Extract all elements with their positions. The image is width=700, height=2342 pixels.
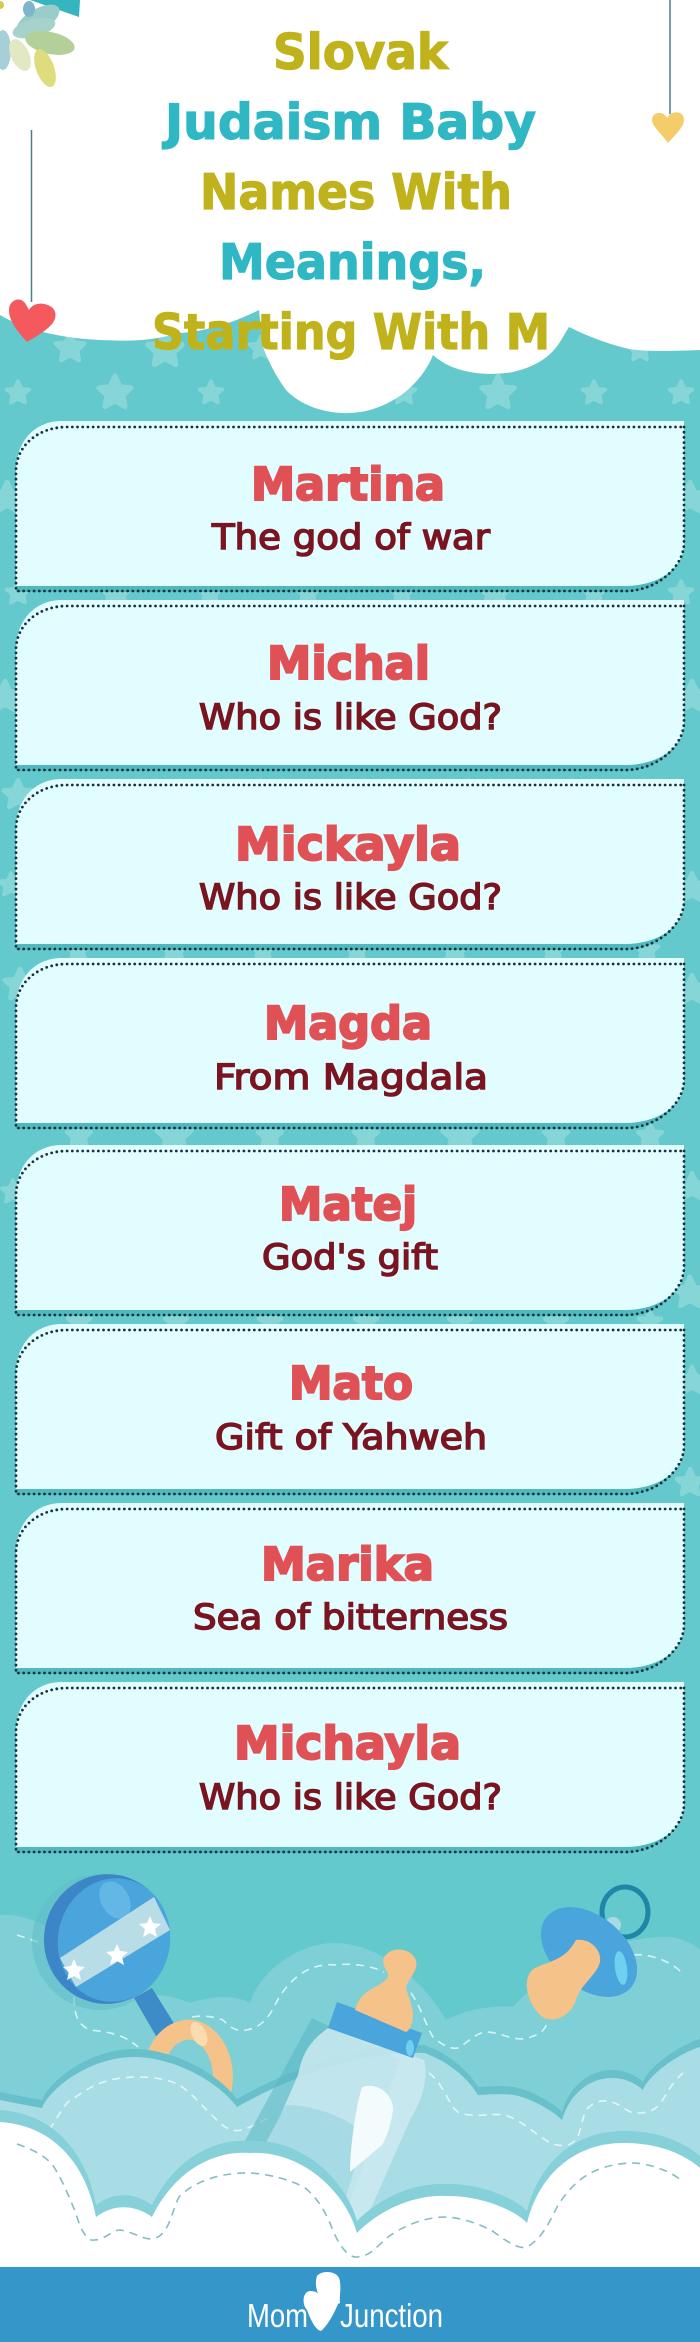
- card: Michayla: Michayla: [234, 1717, 461, 1770]
- card: Matej: God's gift: [262, 1238, 438, 1278]
- left hanging red heart: [9, 130, 56, 342]
- title: Meanings,: [219, 234, 486, 291]
- card: Marika: Marika: [261, 1538, 434, 1591]
- card: Martina: The god of war: [211, 518, 491, 558]
- card: Michal: Michal: [267, 637, 430, 690]
- collar: [328, 2002, 422, 2058]
- title: Judaism Baby: [162, 94, 536, 151]
- card: Martina: [16, 421, 684, 592]
- bottom white cloud shadow: [0, 2110, 700, 2267]
- nipple: [355, 1950, 417, 2032]
- card: Michal: Who is like God?: [199, 698, 502, 738]
- rattle: [17, 1859, 223, 2092]
- card: Michal: [16, 600, 684, 771]
- dashed stitching middle: [49, 2073, 683, 2146]
- title: Names With: [200, 164, 512, 221]
- bottle body: [259, 2028, 426, 2240]
- card: Mato: Mato: [289, 1357, 413, 1410]
- leaf decoration: [0, 0, 80, 90]
- card: Michayla: [16, 1682, 684, 1853]
- dashed stitching lower: [17, 2144, 681, 2257]
- footer bar: [0, 2267, 700, 2342]
- card: Magda: Magda: [264, 997, 432, 1050]
- card: Matej: Matej: [279, 1178, 417, 1231]
- pacifier: [524, 1887, 654, 2020]
- white header cloud: [0, 0, 700, 413]
- card: Mickayla: Mickayla: [235, 818, 461, 871]
- card: Mickayla: Who is like God?: [199, 878, 502, 918]
- card: Matej: [16, 1145, 684, 1316]
- right hanging yellow heart: [652, 0, 684, 143]
- back cloud layer: [0, 1915, 700, 2267]
- mid cloud shadow band: [0, 2039, 700, 2267]
- bottom white cloud: [0, 2122, 700, 2267]
- card: Mato: Gift of Yahweh: [215, 1418, 487, 1458]
- card: Mickayla: [16, 779, 684, 950]
- title: Slovak: [273, 24, 449, 81]
- card: Magda: [16, 958, 684, 1129]
- card: Martina: Martina: [251, 458, 445, 511]
- card: Marika: Sea of bitterness: [193, 1598, 508, 1638]
- MomJunction logo: [247, 2272, 443, 2334]
- mid cloud layer: [0, 2047, 700, 2267]
- card: Marika: [16, 1503, 684, 1674]
- MomJunction logo: Mom: [247, 2297, 308, 2334]
- baby bottle: [240, 1950, 426, 2240]
- handle: [134, 1988, 175, 2036]
- card: Magda: From Magdala: [214, 1058, 488, 1098]
- card: Mato: [16, 1324, 684, 1495]
- card: Michayla: Who is like God?: [199, 1778, 502, 1818]
- teal pennant: [30, 0, 80, 17]
- MomJunction logo: Junction: [340, 2297, 443, 2334]
- logo silhouette: [304, 2272, 340, 2331]
- title: [152, 24, 550, 361]
- title: Starting With M: [152, 304, 550, 361]
- star pattern: [0, 332, 700, 1494]
- dashed stitching upper: [17, 1935, 681, 2048]
- orange ring: [154, 2030, 223, 2092]
